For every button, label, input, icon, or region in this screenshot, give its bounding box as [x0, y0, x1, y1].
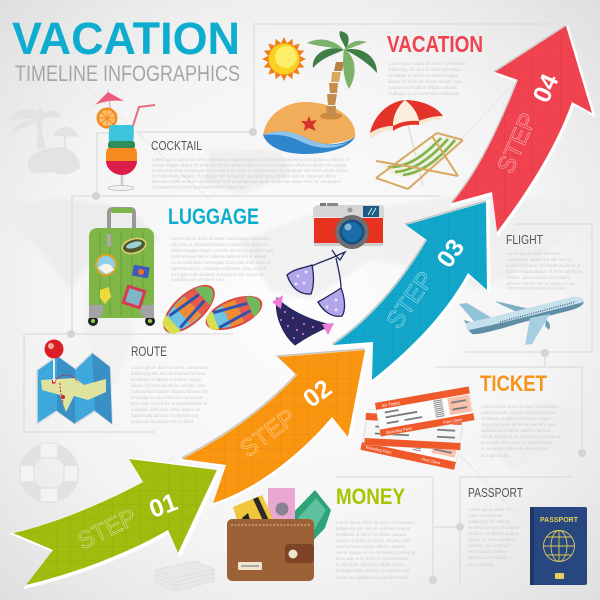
text: luggage: nostrud exercitation ullamco laboris nisi ut aliquip: [171, 254, 267, 259]
text: passport: Lorem ipsum dolor sit: [468, 507, 511, 512]
text: money: Duis aute irure dolor in reprehenderit: [336, 556, 408, 561]
icon: camera: [313, 203, 384, 249]
text: route: ut aliquip ex ea commodo consequat.: [131, 395, 204, 400]
icon: flip flops: [155, 276, 267, 342]
text: passport: amet, consectetur: [468, 513, 503, 518]
text: money: eu fugiat nulla pariatur. Excepteur sint: [336, 568, 410, 573]
arrow: step 01: STEP: [73, 504, 141, 555]
icon: wallet with cards and cash: [227, 488, 331, 581]
text: luggage: dolore magna aliqua. Ut enim ad minim veniam, quis: [171, 248, 274, 253]
arrow: step 02: [182, 349, 366, 503]
heading: route: ROUTE: [131, 343, 167, 359]
text: vacation: aliqua. Ut enim ad minim veniam, quis: [388, 79, 463, 84]
icon: airplane: [459, 297, 584, 345]
sticker: red square: [121, 284, 147, 310]
text: ticket: nisi ut aliquip ex ea commodo consequat.: [481, 434, 562, 439]
text: route: incididunt ut labore et dolore magna: [131, 377, 201, 382]
arrow: step 03: [332, 201, 488, 380]
icon: cocktail: [95, 90, 155, 190]
sticker: yellow tag: [100, 287, 111, 304]
heading: vacation: VACATION: [387, 31, 483, 57]
icon: route map: [37, 340, 112, 424]
arrow: step 04: [452, 25, 594, 234]
arrow: step 01: 01: [145, 488, 181, 524]
ghost icon: palm island: [8, 108, 80, 174]
text: passport: aliqua. Ut enim ad minim: [468, 537, 517, 542]
text: flight: eiusmod tempor incididunt ut labore et: [506, 263, 581, 268]
icon: beach umbrella: [370, 100, 443, 185]
icon: passport: [530, 507, 587, 585]
text: ticket: eu fugiat nulla.: [481, 453, 510, 458]
text: route: nostrud exercitation ullamco laboris nisi: [131, 389, 208, 394]
text: vacation: Lorem ipsum dolor sit amet, consectetur: [388, 61, 467, 66]
text: vacation: ut aliquip ex ea commodo consequat.: [388, 91, 461, 96]
text: flight: ullamco laboris nisi ut aliquip ex ea: [506, 281, 574, 286]
text: ticket: nostrud exercitation ullamco laboris: [481, 428, 551, 433]
text: vacation: incididunt ut labore et dolore magna: [388, 73, 458, 78]
text: route: voluptate velit esse cillum dolore eu: [131, 407, 201, 412]
text: passport: ea commodo.: [468, 562, 495, 567]
text: luggage: reprehenderit in voluptate velit esse cillum dolore: [171, 266, 267, 271]
ghost icon: money stack: [155, 561, 214, 591]
sticker: round: [96, 255, 116, 275]
text: luggage: eu fugiat nulla pariatur. Excepteur sint occaecat: [171, 272, 264, 277]
ticket: bottom: [360, 409, 463, 470]
arrow: step 04: 04: [527, 70, 564, 107]
text: flight: dolore magna aliqua. Ut enim ad minim: [506, 269, 583, 274]
text: money: nisi ut aliquip ex ea commodo consequat.: [336, 550, 417, 555]
text: money: adipiscing elit, sed do eiusmod tempor: [336, 526, 411, 531]
palm trunk: [326, 62, 344, 117]
text: route: fugiat nulla pariatur. Excepteur sint: [131, 413, 199, 418]
text: route: adipiscing elit, sed do eiusmod tempor: [131, 371, 206, 376]
icon: bikini: [272, 250, 345, 345]
text: cocktail: ex ea commodo consequat. Duis aute irure dolor in reprehenderit in voluptate velit esse cillum dolore: [152, 168, 348, 173]
arrow: step 01: [13, 459, 219, 586]
text: money: nostrud exercitation ullamco laboris: [336, 544, 406, 549]
text: luggage: elit, sed do eiusmod tempor incididunt ut labore et: [171, 242, 269, 247]
text: ticket: Duis aute irure dolor in reprehenderit: [481, 440, 553, 445]
text: flight: consectetur adipiscing elit, sed do: [506, 257, 572, 262]
text: money: in voluptate velit esse cillum dolore: [336, 562, 404, 567]
subtitle: TIMELINE INFOGRAPHICS: [15, 61, 240, 86]
heading: cocktail: COCKTAIL: [151, 138, 202, 153]
sticker: oval: [121, 236, 147, 256]
text: ticket: aliqua. Ut enim ad minim veniam, quis: [481, 422, 556, 427]
icon: palm island: [263, 31, 377, 154]
heading: money: MONEY: [336, 484, 405, 509]
text: money: Lorem ipsum dolor sit amet, consectetur: [336, 520, 415, 525]
icon: sun: [262, 37, 306, 81]
sticker: square blue: [132, 265, 150, 278]
ticket: top: [375, 387, 474, 436]
text: ticket: incididunt ut labore et dolore magna: [481, 416, 551, 421]
text: route: Lorem ipsum dolor sit amet, consectetur: [131, 365, 210, 370]
text: money: aliqua. Ut enim ad minim veniam, quis: [336, 538, 411, 543]
text: vacation: nostrud exercitation ullamco laboris: [388, 85, 458, 90]
text: flight: veniam, quis nostrud exercitation: [506, 275, 571, 280]
text: flight: Lorem ipsum dolor sit amet,: [506, 251, 560, 256]
text: passport: eiusmod tempor incididunt: [468, 525, 520, 530]
ticket: middle: [364, 413, 462, 450]
text: ticket: adipiscing elit, sed do eiusmod tempor: [481, 410, 556, 415]
text: passport: adipiscing elit, sed do: [468, 519, 511, 524]
text: money: occaecat cupidatat non proident sunt.: [336, 575, 409, 580]
arrow: step 03: 03: [431, 234, 470, 273]
text: cocktail: accusantium doloremque laudantium, totam rem.: [152, 184, 247, 190]
text: vacation: adipiscing elit, sed do eiusmod tempor: [388, 67, 463, 72]
ticket: top: Air Ticket: [381, 400, 401, 408]
world map watermark: [10, 150, 590, 470]
ticket: top: First Class: [443, 417, 462, 425]
text: luggage: cupidatat non proident sunt.: [171, 277, 225, 282]
ghost icon: lifebuoy: [20, 443, 78, 502]
text: money: incididunt ut labore et dolore magna: [336, 532, 406, 537]
text: passport: veniam, quis nostrud: [468, 543, 509, 548]
heading: ticket: TICKET: [480, 371, 547, 396]
text: ticket: in voluptate velit esse cillum dolore: [481, 446, 549, 451]
text: cocktail: Lorem ipsum dolor sit amet, consectetur adipiscing elit, sed do eiusmod tempor incididunt ut labore et: [152, 157, 350, 162]
text: flight: commodo consequat duis aute: [506, 286, 566, 290]
icon: passport: PASSPORT: [540, 517, 579, 524]
icon: beach chair: [376, 133, 463, 189]
title: VACATION: [12, 13, 240, 64]
text: cocktail: deserunt mollit anim id est laborum. Sed ut perspiciatis unde omnis iste natus error sit voluptatem: [152, 179, 341, 184]
text: ticket: Lorem ipsum dolor sit amet, consectetur: [481, 404, 560, 409]
arrow: step 03: STEP: [381, 267, 439, 334]
text: passport: laboris nisi ut aliquip ex: [468, 555, 514, 560]
icon: boarding tickets: [360, 387, 474, 470]
ticket: bottom: First Class: [421, 456, 441, 465]
text: route: aliqua. Ut enim ad minim veniam, quis: [131, 383, 206, 388]
arrow: step 02: STEP: [235, 404, 301, 463]
text: passport: ut labore et dolore magna: [468, 531, 519, 536]
text: luggage: ex ea commodo consequat. Duis aute irure dolor in: [171, 260, 271, 265]
arrow: step 04: STEP: [492, 109, 543, 177]
text: cocktail: dolore magna aliqua. Ut enim ad minim veniam, quis nostrud exercitation ullamco laboris nisi aliquip: [152, 162, 347, 168]
arrow: step 02: 02: [298, 374, 337, 413]
text: cocktail: eu fugiat nulla pariatur. Excepteur sint occaecat cupidatat non proident, sunt in culpa qui officia: [152, 174, 336, 178]
icon: luggage: [88, 208, 155, 326]
text: luggage: Lorem ipsum dolor sit amet, consectetur adipiscing: [171, 236, 270, 241]
heading: flight: FLIGHT: [506, 232, 543, 247]
heading: passport: PASSPORT: [468, 485, 523, 500]
text: route: Duis aute irure dolor in reprehenderit in: [131, 401, 208, 406]
text: passport: exercitation ullamco: [468, 549, 507, 554]
ticket: top: Boarding Pass: [386, 426, 412, 435]
ticket: bottom: Boarding Pass: [366, 445, 392, 455]
heading: luggage: LUGGAGE: [168, 204, 259, 229]
text: route: occaecat cupidatat non proident.: [131, 419, 194, 424]
